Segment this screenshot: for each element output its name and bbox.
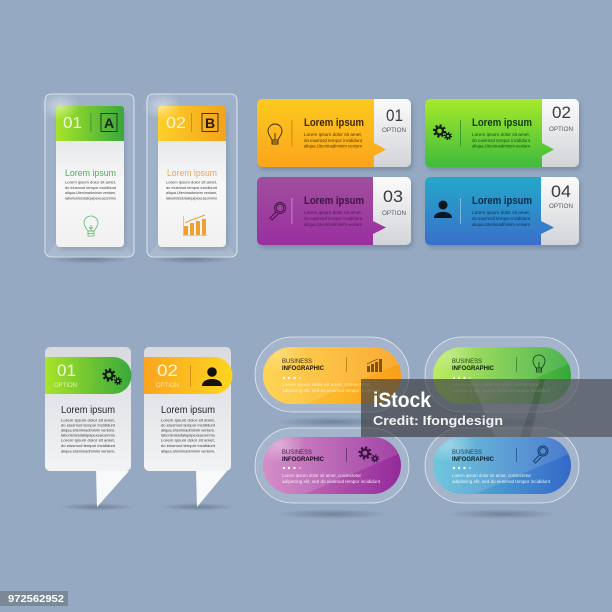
icon: light bulb [268,124,282,144]
panel: option 02 [425,99,581,170]
watermark logo: iStock [373,389,431,412]
orange header [158,106,226,141]
panel: pin card 02 [144,347,235,511]
body text: do eiusmod tempor incididunt [166,185,218,190]
panel: blue glass pill [424,427,579,519]
body text: Lorem ipsum dolor sit amet, [161,438,215,442]
colour block with arrow [425,99,554,167]
body text [472,132,531,148]
body text [452,382,551,393]
heading: Lorem ipsum [167,168,217,178]
body text [65,180,117,200]
letter box A [101,114,117,132]
panel: yellow glass pill [254,337,409,427]
number: 04 [551,182,571,201]
body text: Lorem ipsum dolor sit amet, [472,132,530,137]
card body [144,347,231,471]
body text: aliqua.Utenimadminim veniam, [61,428,115,432]
icon: person [434,200,452,218]
colour pill [433,347,571,404]
heading: Lorem ipsum [61,405,115,416]
panel: option 01 [257,99,413,170]
body text: Lorem ipsum dolor sit amet, consectetur [282,473,362,478]
label: INFOGRAPHIC [282,365,324,372]
panel: green glass pill [424,337,579,427]
letter box A: A [104,115,114,131]
panel: option 03 [257,177,413,248]
heading: Lorem ipsum [304,195,364,207]
body text: laborisnisiutaliquipexeacommo [161,432,216,438]
body text: Lorem ipsum dolor sit amet, [166,180,217,184]
body text: do eiusmod tempor incididunt [161,443,216,448]
label [282,358,324,372]
option tab [360,177,411,245]
body text [472,210,531,227]
option label: OPTION [549,203,573,210]
rating dots [453,377,471,379]
heading: Lorem ipsum [65,168,116,178]
panel: option 04 [425,177,581,248]
card body [45,347,131,471]
card body [158,135,226,247]
label: BUSINESS [282,449,312,456]
body text: do eiusmod tempor incididunt [304,138,363,143]
icon: bar chart [367,359,382,372]
body text [161,418,216,454]
body text: do eiusmod tempor incididunt [61,443,116,448]
body text: Lorem ipsum dolor sit amet, consectetur [452,473,532,478]
icon: gears [434,126,451,139]
icon: light bulb [533,355,545,372]
panel: pin card 01 [45,347,135,511]
heading: Lorem ipsum [472,195,532,207]
body text: Lorem ipsum dolor sit amet, [61,438,115,442]
icon: magnifier [270,202,286,220]
option label: OPTION [54,383,77,389]
colour block with arrow [257,99,386,167]
watermark credit: Credit: Ifongdesign [373,413,503,428]
label: BUSINESS [452,358,482,365]
icon: bar chart [184,215,208,236]
rating dots [283,467,301,469]
body text [61,418,116,454]
body text: laborisnisiutaliquipexeacommo [166,196,218,200]
label: BUSINESS [282,358,312,365]
option label: OPTION [156,383,179,389]
body text: aliqua.Utenimadminim veniam, [65,190,116,195]
colour block with arrow [425,177,554,245]
option label: OPTION [382,127,406,134]
number 02: 02 [166,115,186,132]
label: INFOGRAPHIC [282,456,324,463]
body text: Lorem ipsum dolor sit amet, [61,418,115,422]
heading: Lorem ipsum [304,117,364,129]
colour pill [263,437,401,494]
body text: adipiscing elit, sed do eiusmod tempor incididunt [282,479,381,484]
body text: Lorem ipsum dolor sit amet, [304,210,362,215]
banner [45,357,132,394]
body text: laborisnisiutaliquipexeacommo [65,196,117,200]
body text: Lorem ipsum dolor sit amet, consectetur [282,382,371,387]
number 01: 01 [63,115,82,132]
panel: glass card A [40,92,134,264]
body text: Lorem ipsum dolor sit amet, consectetur [452,382,541,387]
icon: gears [104,370,121,384]
body text [304,210,363,227]
colour pill [433,437,571,494]
body text: aliqua.Utenimadminim veniam [472,222,531,227]
body text: aliqua.Utenimadminim veniam, [161,428,215,432]
colour pill [263,347,401,404]
body text: aliqua.Utenimadminim veniam, [161,448,215,454]
body text: do eiusmod tempor incididunt [472,138,531,143]
label: BUSINESS [452,449,482,456]
colour block with arrow [257,177,386,245]
body text: do eiusmod tempor incididunt [304,216,363,221]
option tab [360,99,411,167]
rating dots [453,467,471,469]
body text: aliqua.Utenimadminim veniam [304,144,363,148]
number: 01 [386,106,403,125]
rating dots [283,377,301,379]
letter box B [202,114,218,132]
icon: light bulb [84,216,98,236]
body text: do eiusmod tempor incididunt [161,422,216,428]
body text [166,180,218,200]
label [282,449,324,463]
icon: magnifier [534,446,548,463]
body text: do eiusmod tempor incididunt [472,216,531,221]
heading: Lorem ipsum [472,117,532,129]
body text: aliqua.Utenimadminim veniam [472,144,531,148]
body text: adipiscing elit, sed do eiusmod tempor incididunt [452,479,551,484]
body text: do eiusmod tempor incididunt [65,185,117,190]
body text [452,473,551,484]
panel: purple glass pill [254,427,409,519]
option tab [528,177,579,245]
green header [56,106,124,141]
body text: Lorem ipsum dolor sit amet, [304,132,362,137]
body text: aliqua.Utenimadminim veniam, [166,190,217,195]
pin tip [196,471,227,507]
body text [282,473,381,484]
number: 02 [552,103,571,122]
image id tag [0,591,68,606]
number: 01 [57,361,76,380]
body text [282,382,381,393]
number: 03 [383,187,403,206]
pin tip [96,471,129,507]
label [452,449,494,463]
label: INFOGRAPHIC [452,456,494,463]
body text [304,132,363,148]
banner [144,357,232,394]
option label: OPTION [549,126,573,133]
icon: person [202,367,222,386]
watermark banner [361,379,612,437]
label [452,358,494,372]
body text: do eiusmod tempor incididunt [61,422,116,428]
number: 02 [157,361,178,380]
heading: Lorem ipsum [161,405,215,416]
body text: adipiscing elit, sed do eiusmod tempor incididunt [452,388,551,393]
body text: laborisnisiutaliquipexeacommo [61,432,116,438]
body text: Lorem ipsum dolor sit amet, [65,180,116,184]
option label: OPTION [382,210,406,217]
body text: aliqua.Utenimadminim veniam, [61,448,115,454]
panel: glass card B [142,92,237,264]
body text: adipiscing elit, sed do eiusmod tempor incididunt [282,388,381,393]
body text: aliqua.Utenimadminim veniam [304,222,363,227]
letter box B: B [205,115,215,131]
body text: Lorem ipsum dolor sit amet, [472,210,530,215]
option tab [528,99,579,167]
image id tag: 972562952 [8,594,64,605]
card body [56,135,124,247]
icon: gears [360,448,378,462]
label: INFOGRAPHIC [452,365,494,372]
body text: Lorem ipsum dolor sit amet, [161,418,215,422]
